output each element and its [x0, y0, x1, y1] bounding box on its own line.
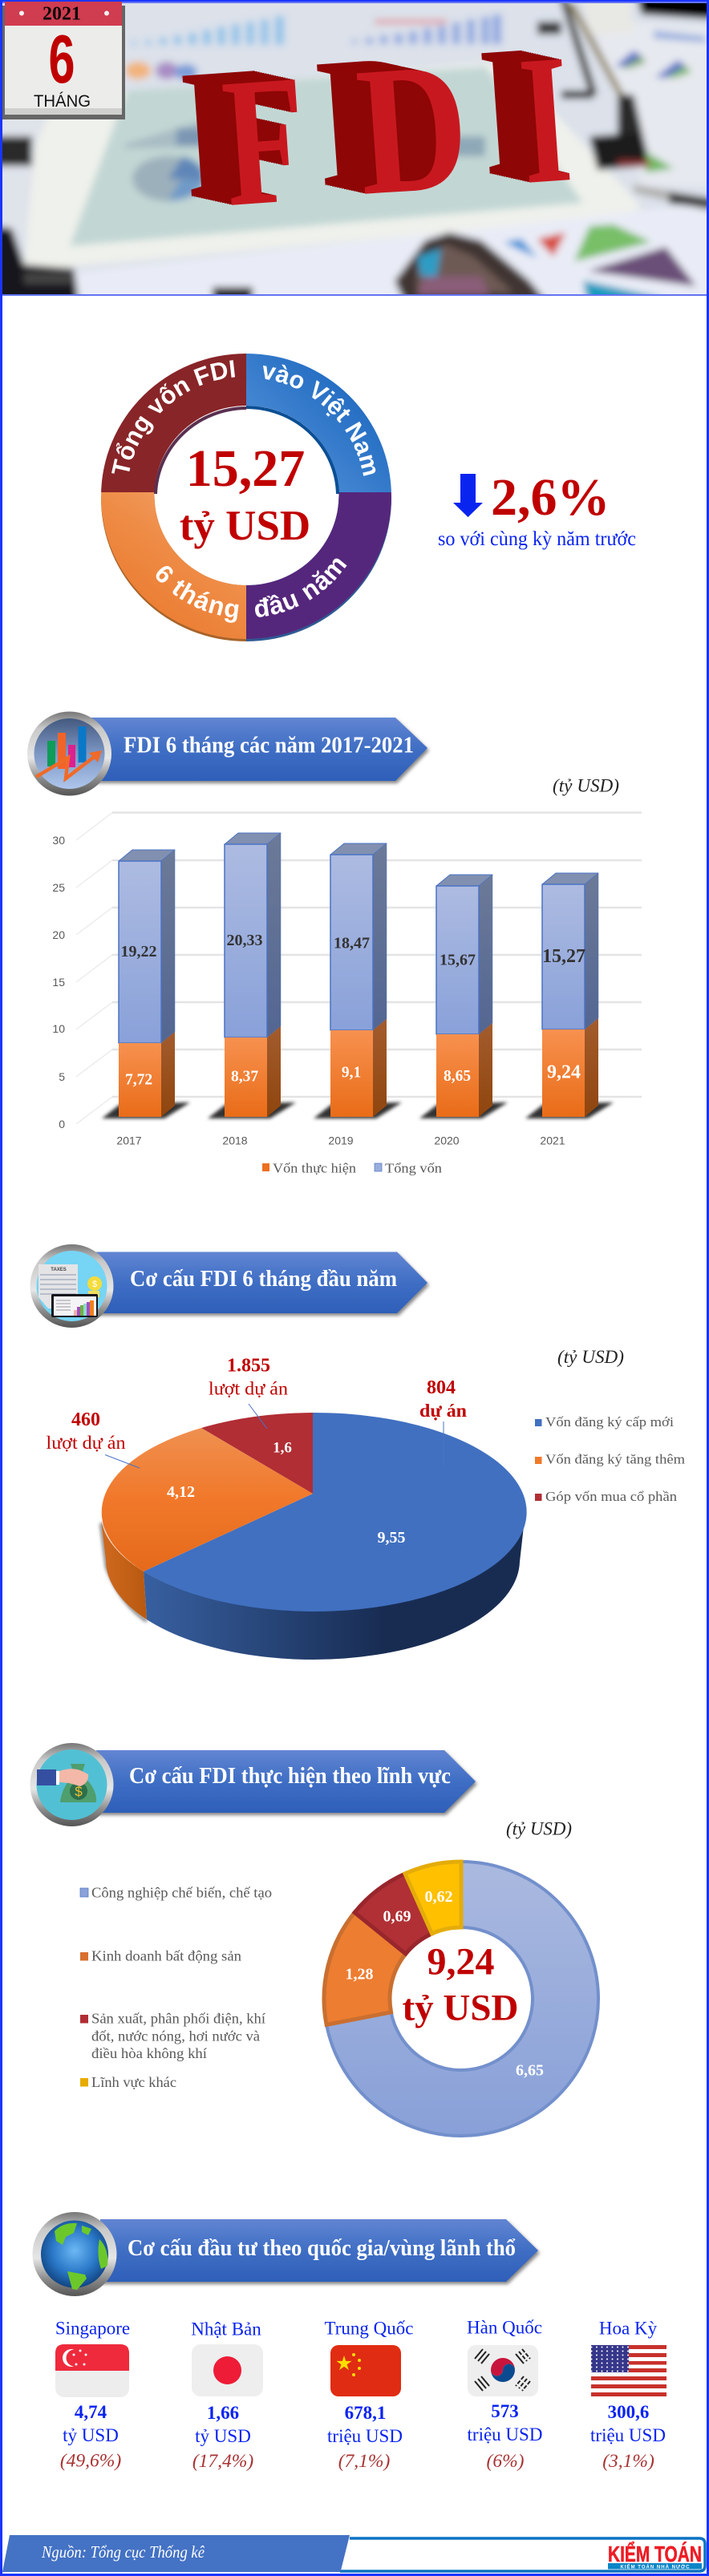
heading text: Cơ cấu FDI thực hiện theo lĩnh vực — [129, 1764, 451, 1789]
bar 2018 — [225, 833, 281, 1117]
total capital values: 19,22 — [120, 943, 157, 960]
country: Trung Quốc: triệu USD — [327, 2426, 403, 2446]
flag: USA — [591, 2345, 666, 2396]
country: Singapore: tỷ USD — [63, 2425, 119, 2445]
segment values: 6,65 — [516, 2062, 544, 2080]
3D pie chart — [47, 1355, 685, 1660]
donut chart — [324, 1862, 598, 2136]
section heading: FDI 6 tháng các năm — [27, 712, 427, 795]
icon: rising chart — [27, 712, 111, 795]
sector legend: Lĩnh vực khác — [91, 2074, 176, 2090]
slice: Vốn đăng ký tăng thêm — [102, 1428, 313, 1571]
segment values: 0,69 — [383, 1908, 411, 1926]
annotation: 804 dự án — [419, 1377, 467, 1421]
x axis labels: 2018 — [222, 1134, 248, 1146]
change value: 2,6% — [491, 468, 610, 527]
realised capital values: 9,1 — [342, 1065, 361, 1081]
banner arrow — [96, 1750, 476, 1813]
country: Hàn Quốc — [467, 2317, 542, 2472]
country: Singapore — [55, 2319, 130, 2471]
slice values — [167, 1440, 406, 1547]
total capital values — [120, 932, 585, 969]
segment: Sản xuất, phân phối điện — [354, 1874, 432, 1954]
slice: Góp vốn mua cổ phần — [201, 1413, 313, 1494]
ring label: đầu năm: đầu năm — [255, 558, 346, 617]
unit note: (tỷ USD) — [557, 1347, 624, 1367]
y axis labels — [52, 834, 65, 1130]
icon: tax form and laptop: $ — [92, 1280, 97, 1289]
country: Nhật Bản: 1,66 — [207, 2403, 239, 2423]
y axis labels: 20 — [52, 928, 65, 941]
icon: tax form and laptop: TAXES — [51, 1268, 67, 1272]
change caption: so với cùng kỳ năm trước — [438, 528, 636, 550]
donut centre unit: tỷ USD — [403, 1987, 518, 2028]
heading text: FDI 6 tháng các năm 2017-2021 — [124, 733, 414, 758]
bar 2021 — [542, 873, 598, 1117]
title: FDI — [182, 15, 577, 245]
y axis labels: 30 — [52, 834, 65, 847]
annotation: 1.855 lượt dự án: lượt dự án — [209, 1379, 289, 1398]
segment values: 1,28 — [345, 1966, 374, 1984]
sector legend: Công nghiệp chế biến, chế tạo — [91, 1884, 272, 1900]
unit note: (tỷ USD) — [506, 1818, 572, 1839]
flag: China — [330, 2345, 401, 2396]
annotation: 1.855 lượt dự án: 1.855 — [227, 1355, 270, 1376]
title: FDI: D — [351, 22, 474, 234]
bar 2019 — [330, 843, 387, 1117]
country: Hoa Kỳ: (3,1%) — [602, 2451, 654, 2472]
total capital values: 20,33 — [226, 932, 263, 949]
icon: globe — [32, 2212, 117, 2296]
footer source bar — [2, 2535, 350, 2572]
total capital values: 15,27 — [542, 946, 585, 967]
sector legend — [80, 1884, 272, 2090]
sector legend: Kinh doanh bất động sản — [91, 1948, 241, 1964]
country: Nhật Bản: (17,4%) — [192, 2451, 253, 2472]
pie legend: Vốn đăng ký tăng thêm — [545, 1451, 685, 1467]
country: Trung Quốc — [325, 2319, 413, 2472]
unit note: (tỷ USD) — [553, 776, 619, 795]
segment: Kinh doanh bất động sản — [324, 1912, 406, 2024]
x axis labels: 2019 — [328, 1134, 354, 1146]
country: Hàn Quốc: (6%) — [487, 2451, 525, 2472]
flag: Singapore — [55, 2344, 129, 2397]
country: Trung Quốc: (7,1%) — [338, 2451, 390, 2472]
bar floor shadows — [102, 1102, 614, 1118]
ring label: 6 tháng: 6 tháng — [156, 566, 239, 623]
annotation: 460 lượt dự án: 460 — [71, 1409, 100, 1430]
country: Trung Quốc: 678,1 — [345, 2403, 386, 2423]
ring quadrants — [96, 345, 396, 645]
section heading: Cơ cấu FDI thực hiện theo lĩnh vực — [30, 1743, 476, 1826]
x axis labels — [116, 1134, 565, 1146]
annotation: 460 lượt dự án — [47, 1409, 126, 1453]
x axis labels: 2021 — [540, 1134, 565, 1146]
footer outline — [340, 2538, 705, 2571]
country: Hàn Quốc: Hàn Quốc — [467, 2317, 542, 2338]
country: Singapore: 4,74 — [75, 2402, 107, 2422]
ring label: Tổng vốn FDI: Tổng vốn FDI — [111, 360, 235, 474]
x axis labels: 2020 — [434, 1134, 460, 1146]
total capital values: 18,47 — [334, 935, 370, 952]
annotation: 460 lượt dự án: lượt dự án — [47, 1433, 126, 1453]
slice values: 9,55 — [377, 1529, 406, 1547]
realised capital values: 7,72 — [125, 1071, 152, 1089]
segment: Công nghiệp chế biến, chế tạo — [326, 1862, 598, 2136]
country: Hoa Kỳ: Hoa Kỳ — [599, 2319, 658, 2338]
chart legend: Tổng vốn — [385, 1161, 443, 1175]
y axis labels: 0 — [59, 1118, 65, 1130]
calendar month label: THÁNG — [34, 92, 91, 111]
icon: tax form and laptop — [30, 1244, 114, 1328]
y axis labels: 10 — [52, 1022, 65, 1035]
annotation: 804 dự án: 804 — [427, 1377, 456, 1398]
country: Nhật Bản: Nhật Bản — [191, 2319, 261, 2339]
ring centre value: 15,27 — [186, 439, 305, 498]
change callout — [438, 468, 636, 550]
country: Trung Quốc: Trung Quốc — [325, 2319, 413, 2338]
chart legend: Vốn thực hiện — [273, 1161, 357, 1175]
calendar number: 6 — [48, 22, 75, 98]
ring 3D rim — [96, 496, 396, 649]
flag: Japan — [192, 2344, 263, 2396]
chart legend — [262, 1161, 443, 1175]
pie side: orange — [100, 1514, 147, 1620]
total capital values: 15,67 — [440, 951, 476, 969]
heading text: Cơ cấu FDI 6 tháng đầu năm — [130, 1267, 397, 1292]
banner arrow — [91, 718, 427, 781]
pie legend: Vốn đăng ký cấp mới — [545, 1414, 674, 1430]
country: Hoa Kỳ: triệu USD — [590, 2425, 666, 2445]
y axis labels: 25 — [52, 881, 65, 894]
header top and bottom lines — [0, 2, 709, 296]
pie legend — [535, 1414, 685, 1504]
country: Nhật Bản — [191, 2319, 263, 2472]
realised capital values: 9,24 — [547, 1062, 581, 1082]
y axis labels: 15 — [52, 976, 65, 989]
country: Nhật Bản: tỷ USD — [195, 2426, 251, 2446]
ring centre unit: tỷ USD — [180, 503, 310, 549]
country: Hàn Quốc: 573 — [491, 2401, 519, 2421]
calendar badge — [2, 2, 125, 119]
icon: down arrow — [453, 474, 483, 517]
annotation: 804 dự án: dự án — [419, 1401, 467, 1421]
icon: hand with money bag: $ — [75, 1784, 83, 1799]
source text: Nguồn: Tổng cục Thống kê — [41, 2542, 205, 2562]
sector legend: Sản xuất, phân phối điện, khí — [91, 2011, 265, 2027]
calendar year: 2021 — [43, 3, 81, 24]
title: FDI: F — [217, 35, 312, 245]
country: Hoa Kỳ: 300,6 — [608, 2402, 649, 2422]
pie side: blue — [144, 1512, 525, 1660]
annotation: 1.855 lượt dự án — [209, 1355, 289, 1398]
header photo background — [0, 0, 709, 313]
segment values: 0,62 — [425, 1888, 452, 1906]
realised capital values: 8,65 — [444, 1068, 471, 1085]
slice: Vốn đăng ký cấp mới — [144, 1413, 527, 1612]
flag: Korea — [468, 2345, 538, 2396]
country: Hoa Kỳ — [590, 2319, 666, 2472]
pie legend: Góp vốn mua cổ phần — [545, 1489, 678, 1504]
segment values — [345, 1888, 544, 2080]
ring label: vào Việt Nam: vào Việt Nam — [263, 364, 375, 476]
y axis labels: 5 — [59, 1070, 65, 1083]
banner arrow — [96, 1252, 427, 1313]
slice values: 1,6 — [273, 1440, 292, 1456]
logo: Kiểm Toán: KIỂM TOÁN NHÀ NƯỚC — [621, 2564, 690, 2570]
x axis labels: 2017 — [116, 1134, 142, 1146]
segment: Lĩnh vực khác — [405, 1862, 461, 1934]
realised capital values — [125, 1062, 581, 1089]
ring: total FDI capital — [101, 354, 391, 641]
bar 2020 — [436, 875, 492, 1117]
realised capital values: 8,37 — [231, 1068, 258, 1086]
section heading: Cơ cấu FDI 6 tháng đầu năm — [30, 1244, 427, 1328]
icon: hand with money bag — [30, 1743, 114, 1826]
banner arrow — [100, 2219, 538, 2282]
donut centre value: 9,24 — [427, 1940, 494, 1984]
slice values: 4,12 — [167, 1483, 195, 1501]
sector legend: đốt, nước nóng, hơi nước và — [91, 2028, 260, 2044]
leader lines — [105, 1404, 444, 1468]
stacked 3D bar chart — [52, 813, 642, 1175]
heading text: Cơ cấu đầu tư theo quốc gia/vùng lãnh thổ — [128, 2235, 516, 2261]
country: Hàn Quốc: triệu USD — [468, 2424, 542, 2445]
title: FDI: I — [514, 15, 577, 222]
section heading: Cơ cấu đầu tư theo quốc gia — [32, 2212, 538, 2296]
sector legend: điều hòa không khí — [91, 2045, 207, 2061]
country: Singapore: (49,6%) — [60, 2450, 121, 2471]
country: Singapore: Singapore — [55, 2319, 130, 2338]
bar 2017 — [119, 850, 175, 1117]
